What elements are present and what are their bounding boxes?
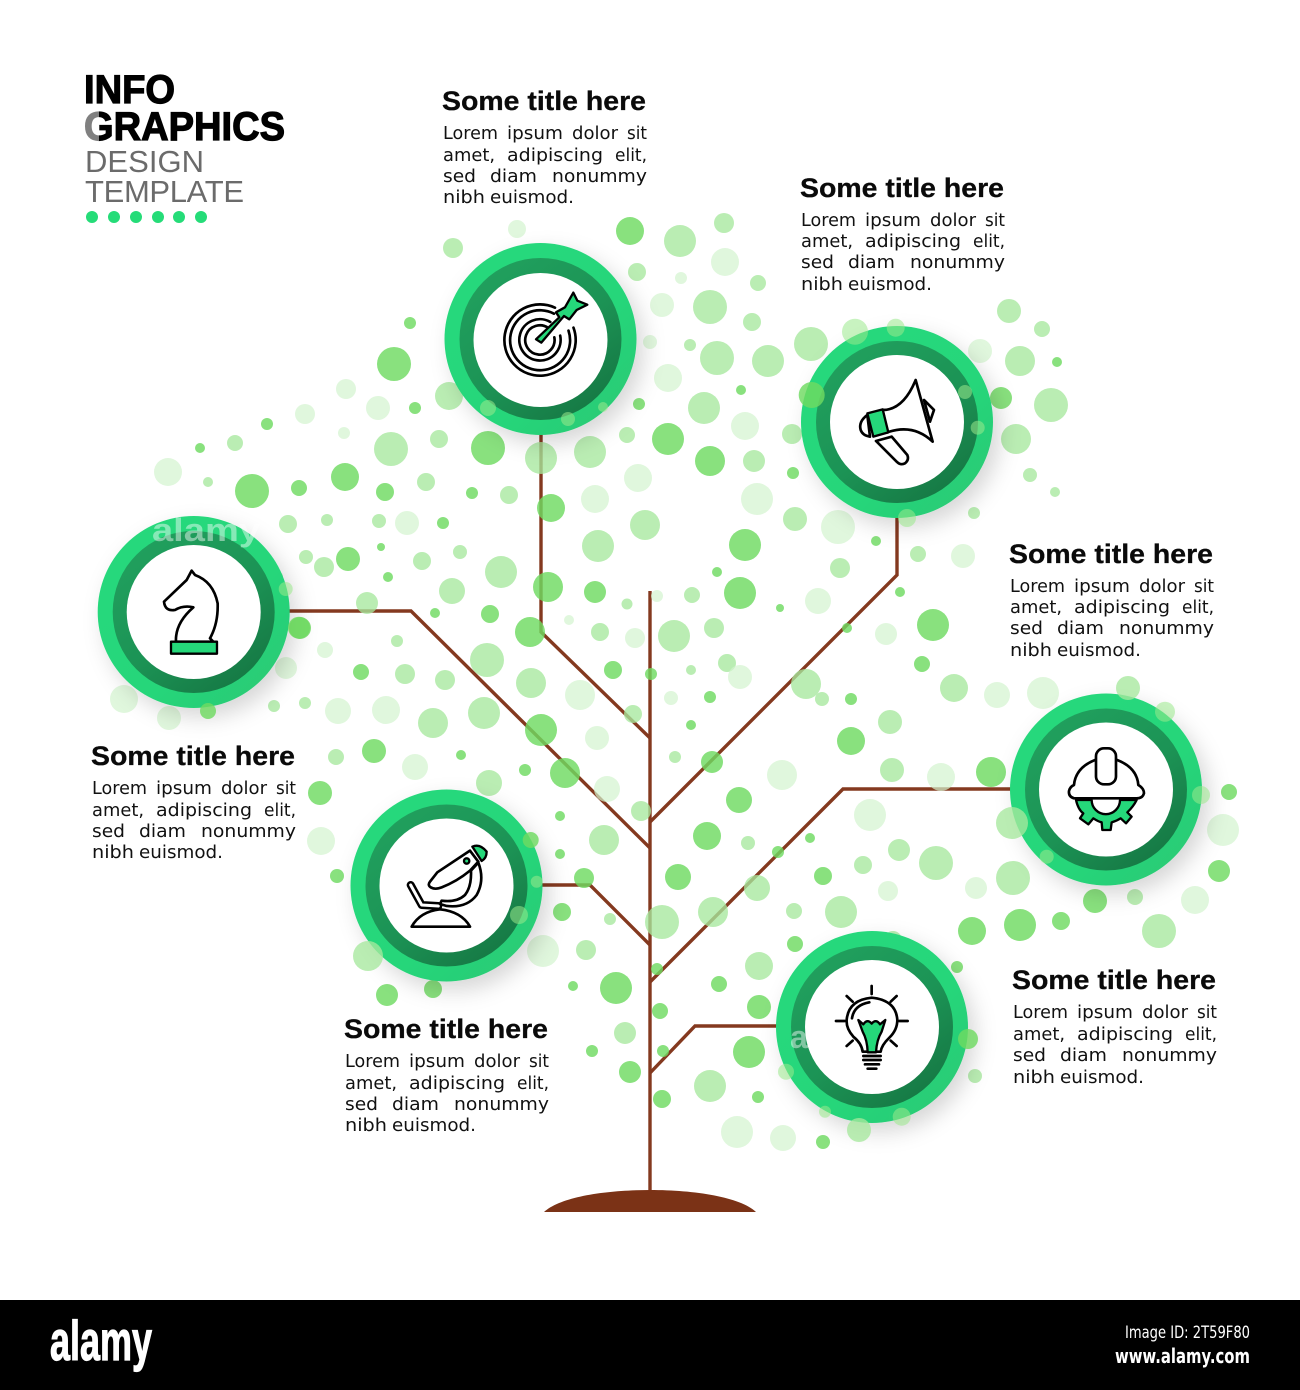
text block: lower left: euismod. [392, 1116, 476, 1136]
text block: lower left: Some title here [344, 1014, 548, 1044]
text block: top right: adipiscing [865, 232, 961, 252]
subheading: design template: DESIGN [85, 144, 204, 179]
text block: lower right: ipsum [1077, 1003, 1133, 1023]
overlay dots on rings [200, 319, 1210, 1142]
text block: top right: euismod. [848, 275, 932, 295]
text block: lower right: amet, [1013, 1025, 1065, 1045]
text block: right: sit [1194, 577, 1214, 597]
text block: top centre [442, 86, 647, 208]
text block: left: elit, [264, 801, 296, 821]
icon: target with arrow [504, 293, 587, 376]
text block: lower right: elit, [1185, 1025, 1217, 1045]
text block: right: Lorem [1010, 577, 1065, 597]
text block: top right: Some title here [800, 173, 1004, 203]
text block: lower right: adipiscing [1077, 1025, 1173, 1045]
text block: right: sed [1010, 619, 1043, 639]
node: light bulb [776, 931, 968, 1123]
text block: lower left: elit, [517, 1074, 549, 1094]
text block: lower right: euismod. [1060, 1068, 1144, 1088]
text block: top right: Lorem [801, 211, 856, 231]
footer url: www.alamy.com [1115, 1344, 1250, 1368]
text block: lower left: sit [529, 1052, 549, 1072]
node: chess knight [98, 512, 290, 708]
watermark fade over G [82, 110, 99, 142]
text block: lower right: diam [1060, 1046, 1107, 1066]
text block: lower right [1012, 965, 1217, 1088]
text block: top right: diam [848, 253, 895, 273]
node: megaphone [801, 326, 993, 518]
subheading: design template: TEMPLATE [85, 174, 244, 209]
icon: microscope [411, 846, 487, 927]
tree trunk and branches [285, 430, 1015, 1192]
text block: top right: sed [801, 253, 834, 273]
foliage dots [110, 213, 1239, 1151]
text block: right: elit, [1182, 598, 1214, 618]
text block: lower left: nonummy [454, 1095, 549, 1115]
text block: top centre: dolor [572, 124, 619, 144]
text block: left: nibh [92, 843, 134, 863]
text block: top centre: amet, [443, 146, 495, 166]
text block: lower right: dolor [1142, 1003, 1189, 1023]
text block: lower left: Lorem [345, 1052, 400, 1072]
text block: right: dolor [1139, 577, 1186, 597]
text block: lower right: sed [1013, 1046, 1046, 1066]
text block: lower right: nibh [1013, 1068, 1055, 1088]
text block: right: amet, [1010, 598, 1062, 618]
text block: top centre: Some title here [442, 86, 646, 116]
text block: top right: nonummy [910, 253, 1005, 273]
text block: right: euismod. [1057, 641, 1141, 661]
text block: right: ipsum [1074, 577, 1130, 597]
text block: lower right: nonummy [1122, 1046, 1217, 1066]
text block: top centre: nonummy [552, 167, 647, 187]
text block: left: sed [92, 822, 125, 842]
text block: lower left: diam [392, 1095, 439, 1115]
text block: right: nonummy [1119, 619, 1214, 639]
text block: left: Some title here [91, 741, 295, 771]
text block: lower left: adipiscing [409, 1074, 505, 1094]
text block: top right [800, 173, 1005, 295]
text block: left [91, 741, 296, 863]
text block: lower left: ipsum [409, 1052, 465, 1072]
footer bar [0, 1300, 1300, 1390]
heading: info graphics: GRAPHICS [84, 105, 285, 149]
node: microscope [350, 790, 542, 982]
text block: lower left: amet, [345, 1074, 397, 1094]
text block: top centre: sit [627, 124, 647, 144]
text block: top centre: adipiscing [507, 146, 603, 166]
subheading: design template [85, 144, 244, 209]
footer image id: Image ID: 2T59F80 [1125, 1323, 1250, 1343]
text block: top centre: nibh [443, 188, 485, 208]
text block: right [1009, 539, 1214, 661]
text block: lower left: nibh [345, 1116, 387, 1136]
footer logo: alamy [50, 1309, 152, 1372]
text block: top right: ipsum [865, 211, 921, 231]
heading: info graphics: INFO [84, 68, 175, 112]
text block: top right: sit [985, 211, 1005, 231]
text block: lower right: Lorem [1013, 1003, 1068, 1023]
text block: lower left: dolor [474, 1052, 521, 1072]
ground mound [544, 1190, 756, 1212]
text block: left: diam [139, 822, 186, 842]
node: target [444, 243, 636, 435]
text block: left: adipiscing [156, 801, 252, 821]
text block: left: amet, [92, 801, 144, 821]
watermark fragment: a [790, 1019, 808, 1055]
text block: right: adipiscing [1074, 598, 1170, 618]
text block: top centre: elit, [615, 146, 647, 166]
text block: right: diam [1057, 619, 1104, 639]
icon: chess knight [164, 571, 218, 654]
decorative dots row [86, 211, 207, 223]
text block: top right: nibh [801, 275, 843, 295]
text block: left: Lorem [92, 779, 147, 799]
text block: left: euismod. [139, 843, 223, 863]
text block: lower left [344, 1014, 549, 1136]
text block: top centre: euismod. [490, 188, 574, 208]
icon: helmet and gear [1069, 748, 1144, 830]
heading: info graphics [84, 68, 285, 149]
title block [82, 68, 285, 223]
text block: left: sit [276, 779, 296, 799]
text block: top right: elit, [973, 232, 1005, 252]
text block: left: nonummy [201, 822, 296, 842]
icon: light bulb [836, 986, 908, 1069]
text block: lower right: sit [1197, 1003, 1217, 1023]
text block: top centre: ipsum [507, 124, 563, 144]
text block: right: nibh [1010, 641, 1052, 661]
text block: top centre: diam [490, 167, 537, 187]
text block: lower left: sed [345, 1095, 378, 1115]
text block: top centre: Lorem [443, 124, 498, 144]
text block: top right: dolor [930, 211, 977, 231]
watermark fragment: alamy [152, 512, 260, 548]
text block: top centre: sed [443, 167, 476, 187]
text block: lower right: Some title here [1012, 965, 1216, 995]
text block: left: ipsum [156, 779, 212, 799]
text block: right: Some title here [1009, 539, 1213, 569]
icon: megaphone [860, 380, 934, 464]
text block: left: dolor [221, 779, 268, 799]
text block: top right: amet, [801, 232, 853, 252]
node: helmet and gear [1010, 694, 1202, 886]
